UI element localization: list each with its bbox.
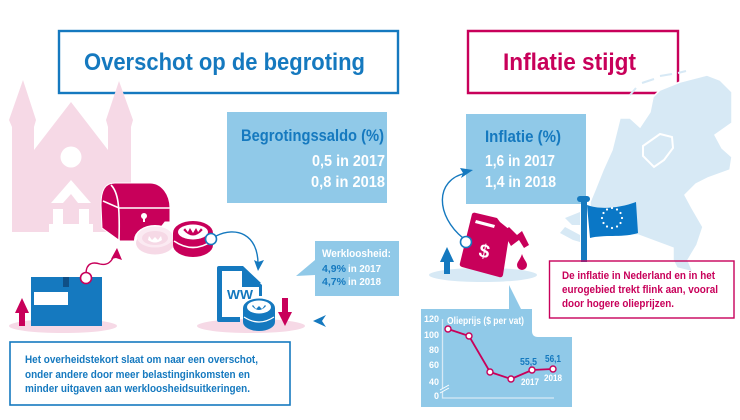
text block: overschot explanation: [10, 342, 290, 405]
icon: small blue arrowhead: [313, 315, 326, 327]
illustration: WW document with coins and arrow down: WW: [227, 287, 254, 302]
illustration: treasure chest: [101, 183, 170, 241]
arrow: coins to WW document: [206, 232, 264, 271]
line chart: olieprijs: Olieprijs ($ per vat): [447, 315, 524, 327]
line chart: olieprijs: [421, 285, 572, 407]
illustration: pale coin: [134, 225, 176, 255]
arrow: box to chest: [80, 248, 122, 284]
line chart: olieprijs: 120: [424, 314, 439, 324]
text block: inflatie explanation: De inflatie in Nederland en in het: [562, 270, 715, 282]
panel: inflatie: 1,6 in 2017: [485, 153, 555, 170]
line chart: olieprijs: 60: [429, 360, 439, 370]
callout: werkloosheid: 4,7%: [322, 276, 347, 288]
title box: begroting: Overschot op de begroting: [84, 49, 365, 76]
panel: begrotingssaldo: [227, 112, 387, 203]
illustration: fuel can: [429, 213, 537, 282]
illustration: fuel can: $: [477, 241, 492, 264]
panel: begrotingssaldo: 0,8 in 2018: [311, 174, 385, 191]
line chart: olieprijs: 2017: [521, 377, 539, 388]
line chart: olieprijs: 100: [424, 330, 439, 340]
illustration: box with label and arrow up: [9, 277, 117, 333]
text block: overschot explanation: Het overheidstekort slaat om naar een overschot,: [25, 354, 258, 366]
line chart: olieprijs: 80: [429, 345, 439, 355]
title box: inflatie: Inflatie stijgt: [503, 49, 636, 76]
callout: werkloosheid: Werkloosheid:: [322, 248, 391, 260]
callout: werkloosheid: 4,9%: [322, 263, 347, 275]
line chart: olieprijs: 55,5: [520, 357, 537, 368]
illustration: coin stack pink: [173, 221, 213, 257]
illustration: WW document with coins and arrow down: [197, 266, 305, 333]
line chart: olieprijs: 40: [429, 377, 439, 387]
callout: werkloosheid: in 2018: [348, 276, 381, 288]
text block: overschot explanation: onder andere door meer belastinginkomsten en: [25, 369, 250, 381]
panel: inflatie: Inflatie (%): [485, 128, 561, 146]
line chart: olieprijs: 0: [434, 391, 439, 401]
callout: werkloosheid: in 2017: [348, 263, 381, 275]
panel: begrotingssaldo: 0,5 in 2017: [312, 153, 385, 170]
text block: inflatie explanation: eurogebied trekt flink aan, vooral: [562, 284, 718, 296]
illustration: Binnenhof building: [9, 80, 133, 232]
title box: begroting: [59, 31, 398, 93]
panel: inflatie: [466, 114, 586, 204]
title box: inflatie: [468, 31, 678, 93]
arrow: fuel can to inflation panel: [442, 168, 473, 238]
map of the Netherlands: [560, 71, 732, 272]
text block: inflatie explanation: door hogere olieprijzen.: [562, 298, 674, 310]
panel: inflatie: 1,4 in 2018: [485, 174, 556, 191]
line chart: olieprijs: 56,1: [545, 354, 561, 365]
line chart: olieprijs: 2018: [544, 373, 562, 384]
panel: begrotingssaldo: Begrotingssaldo (%): [241, 127, 384, 145]
text block: inflatie explanation: [550, 261, 734, 318]
callout: werkloosheid: [296, 241, 399, 296]
icon: EU flag: [577, 196, 638, 262]
text block: overschot explanation: minder uitgaven aan werkloosheidsuitkeringen.: [25, 383, 250, 395]
